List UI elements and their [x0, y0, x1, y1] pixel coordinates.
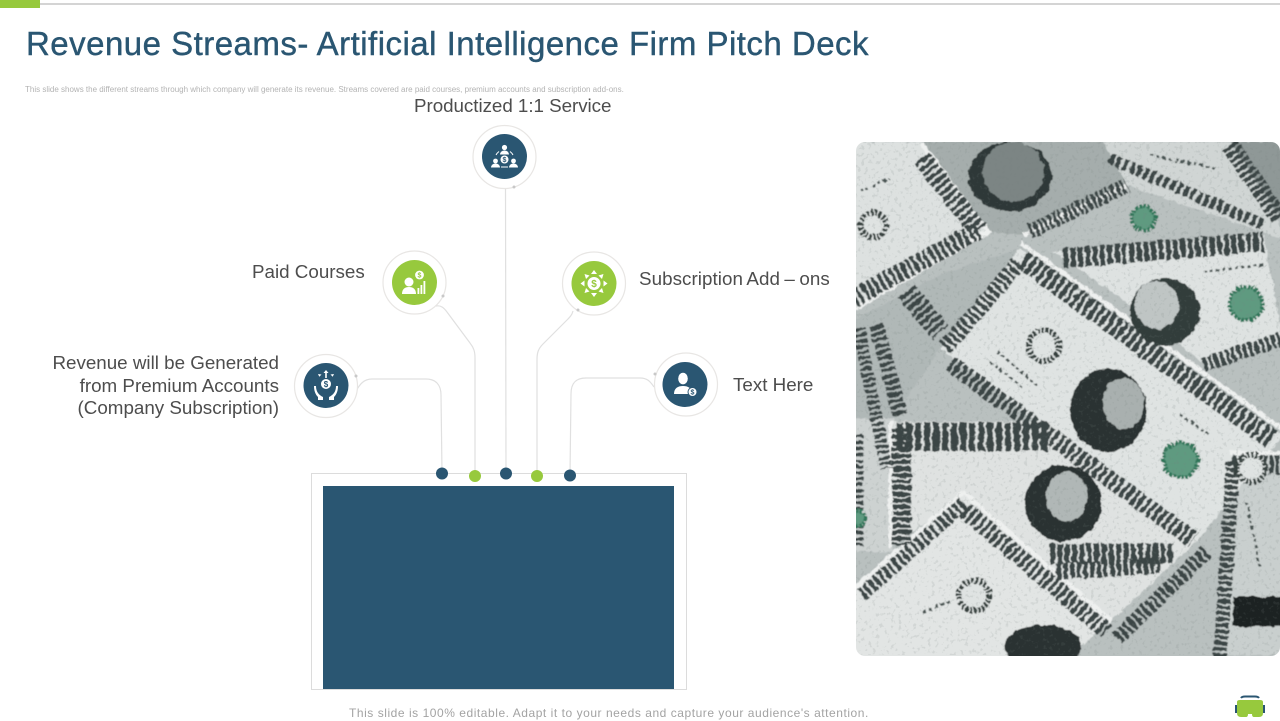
icon: productized service	[473, 126, 536, 188]
footer note: This slide is 100% editable. Adapt it to your needs and capture your audience's attention.	[349, 706, 869, 720]
photo: scattered dollar bills	[856, 142, 1280, 656]
connector lines	[356, 188, 654, 476]
base box fill	[323, 486, 674, 689]
icon: premium accounts	[294, 354, 358, 418]
seals	[861, 212, 1266, 611]
label: subscription add-ons: Subscription Add – ons	[639, 268, 830, 288]
connector end dots	[436, 468, 576, 482]
icon: paid courses	[383, 251, 446, 314]
icon: paid courses: $	[418, 272, 422, 280]
label: premium accounts: Revenue will be Generated	[52, 352, 279, 373]
label: premium accounts: (Company Subscription)	[78, 397, 279, 418]
label: productized service: Productized 1:1 Service	[414, 95, 611, 116]
icon: text here: $	[691, 390, 695, 396]
label: text here: Text Here	[733, 374, 813, 395]
logo icon	[1235, 696, 1265, 717]
label: premium accounts	[52, 352, 279, 418]
label: paid courses: Paid Courses	[252, 261, 365, 282]
icon: productized service: $	[503, 157, 507, 164]
icon: premium accounts: $	[324, 380, 329, 389]
icon: subscription add-ons: $	[591, 279, 597, 290]
printed borders	[853, 145, 1280, 662]
title: Revenue Streams- Artificial Intelligence Firm Pitch Deck	[26, 25, 869, 62]
subtitle description: This slide shows the different streams through which company will generate its revenue. Streams covered are paid courses, premium accounts and subscription add-ons.	[25, 85, 624, 94]
main bills	[940, 248, 1280, 542]
icon: text here	[654, 353, 718, 416]
label: premium accounts: from Premium Accounts	[80, 374, 279, 396]
serial text hatch	[860, 155, 1263, 612]
icon: subscription add-ons	[562, 252, 626, 315]
upper bills	[850, 142, 988, 312]
portraits	[968, 142, 1052, 212]
top accent bar	[0, 0, 1280, 8]
base box outline	[312, 474, 686, 690]
